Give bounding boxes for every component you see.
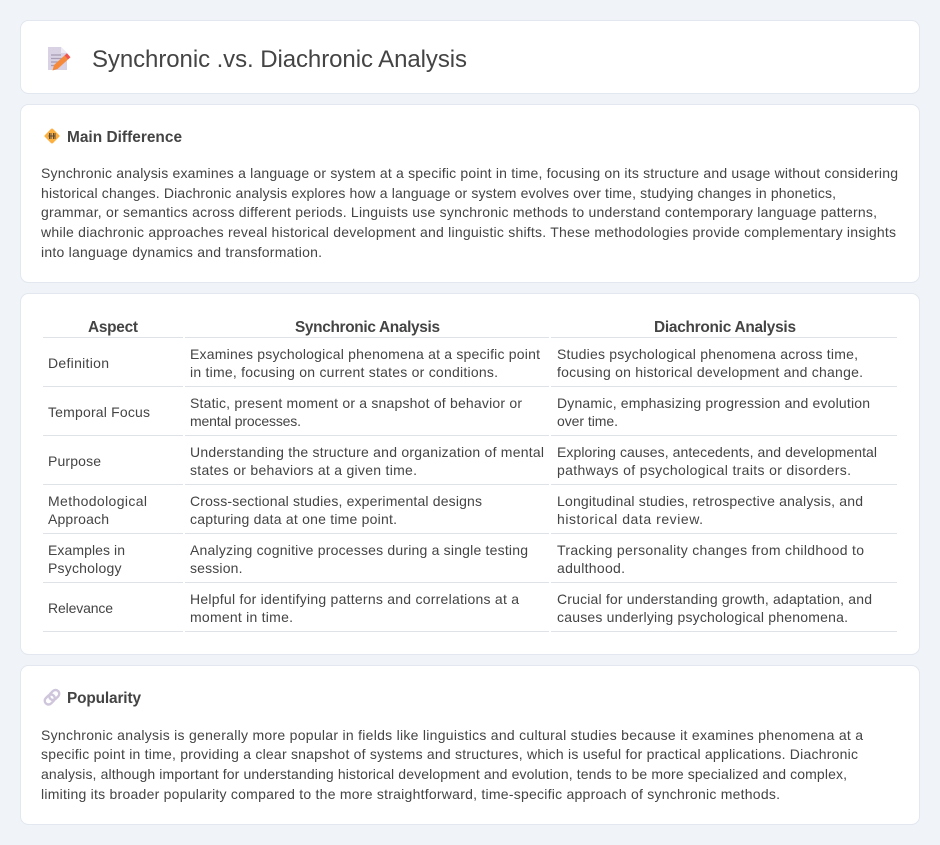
row: definition	[43, 346, 897, 386]
paragraph: main difference: historical changes. Diachronic analysis explores how a language or system evolves over time, studying changes in phonetics,	[41, 185, 836, 201]
icon: chain link	[43, 688, 61, 706]
row: examples in psychology: session.	[190, 560, 242, 576]
table header: Diachronic Analysis	[654, 319, 796, 336]
table header: Aspect	[88, 319, 138, 336]
row: temporal focus: Temporal Focus	[48, 404, 150, 420]
row: purpose: Purpose	[48, 453, 101, 469]
row: relevance	[43, 591, 897, 632]
row: methodological approach: historical data review.	[557, 511, 703, 527]
row: methodological approach: capturing data at one time point.	[190, 511, 397, 527]
row: methodological approach: Approach	[48, 511, 109, 527]
table header: Synchronic Analysis	[295, 319, 440, 336]
heading: main difference: Main Difference	[67, 129, 182, 146]
row: examples in psychology: adulthood.	[557, 560, 625, 576]
row: purpose: Exploring causes, antecedents, and developmental	[557, 444, 877, 460]
row: relevance: Relevance	[48, 600, 113, 616]
row: purpose: pathways of psychological traits or disorders.	[557, 462, 851, 478]
icon: document with pencil	[48, 47, 70, 70]
title: Synchronic .vs. Diachronic Analysis	[92, 46, 467, 73]
panel: main difference	[20, 104, 920, 282]
panel: title header	[20, 20, 920, 94]
row: examples in psychology: Tracking personality changes from childhood to	[557, 542, 864, 558]
paragraph: main difference	[40, 165, 898, 260]
row: temporal focus	[43, 395, 897, 436]
row: relevance: Crucial for understanding growth, adaptation, and	[557, 591, 872, 607]
row: relevance: moment in time.	[190, 609, 293, 625]
paragraph: popularity: analysis, although important for understanding historical development and evolution, tends to be more specialized and complex,	[41, 766, 847, 782]
row: temporal focus: Static, present moment or a snapshot of behavior or	[190, 395, 522, 411]
paragraph: popularity: limiting its broader popularity compared to the more straightforward, time-specific approach of synchronic methods.	[41, 786, 780, 802]
row: examples in psychology: Psychology	[48, 560, 122, 576]
paragraph: main difference: while diachronic approaches reveal historical development and linguistic shifts. These methodologies provide complementary insights	[40, 224, 896, 240]
row: definition: Definition	[48, 355, 109, 371]
row: temporal focus: mental processes.	[190, 413, 301, 429]
row: purpose	[43, 444, 897, 484]
row: definition: focusing on historical development and change.	[557, 364, 863, 380]
panel: comparison table	[20, 294, 920, 654]
panel: popularity	[20, 666, 920, 824]
row: examples in psychology: Analyzing cognitive processes during a single testing	[190, 542, 528, 558]
row: examples in psychology	[43, 542, 897, 582]
row: definition: in time, focusing on current states or conditions.	[190, 364, 498, 380]
row: methodological approach: Longitudinal studies, retrospective analysis, and	[557, 493, 863, 509]
row: relevance: Helpful for identifying patterns and correlations at a	[190, 591, 519, 607]
row: purpose: states or behaviors at a given time.	[190, 462, 417, 478]
row: methodological approach: Methodological	[48, 493, 147, 509]
icon: orange diamond sign	[44, 128, 60, 144]
paragraph: popularity: specific point in time, providing a clear snapshot of systems and structures, which is useful for practical applications. Diachronic	[41, 746, 858, 762]
paragraph: popularity	[41, 727, 863, 802]
row: purpose: Understanding the structure and organization of mental	[190, 444, 544, 460]
table header	[43, 319, 897, 338]
row: examples in psychology: Examples in	[48, 542, 125, 558]
row: temporal focus: over time.	[557, 413, 618, 429]
row: definition: Examines psychological phenomena at a specific point	[190, 346, 540, 362]
row: relevance: causes underlying psychological phenomena.	[557, 609, 848, 625]
paragraph: main difference: into language dynamics and transformation.	[41, 244, 322, 260]
row: methodological approach	[43, 493, 897, 534]
row: methodological approach: Cross-sectional studies, experimental designs	[190, 493, 482, 509]
row: definition: Studies psychological phenomena across time,	[557, 346, 858, 362]
paragraph: main difference: grammar, or semantics across different periods. Linguists use synchronic methods to understand contemporary language patterns,	[41, 204, 877, 220]
paragraph: popularity: Synchronic analysis is generally more popular in fields like linguistics and cultural studies because it examines phenomena at a	[41, 727, 863, 743]
row: temporal focus: Dynamic, emphasizing progression and evolution	[557, 395, 870, 411]
paragraph: main difference: Synchronic analysis examines a language or system at a specific point in time, focusing on its structure and usage without considering	[41, 165, 898, 181]
heading: popularity: Popularity	[67, 690, 141, 707]
